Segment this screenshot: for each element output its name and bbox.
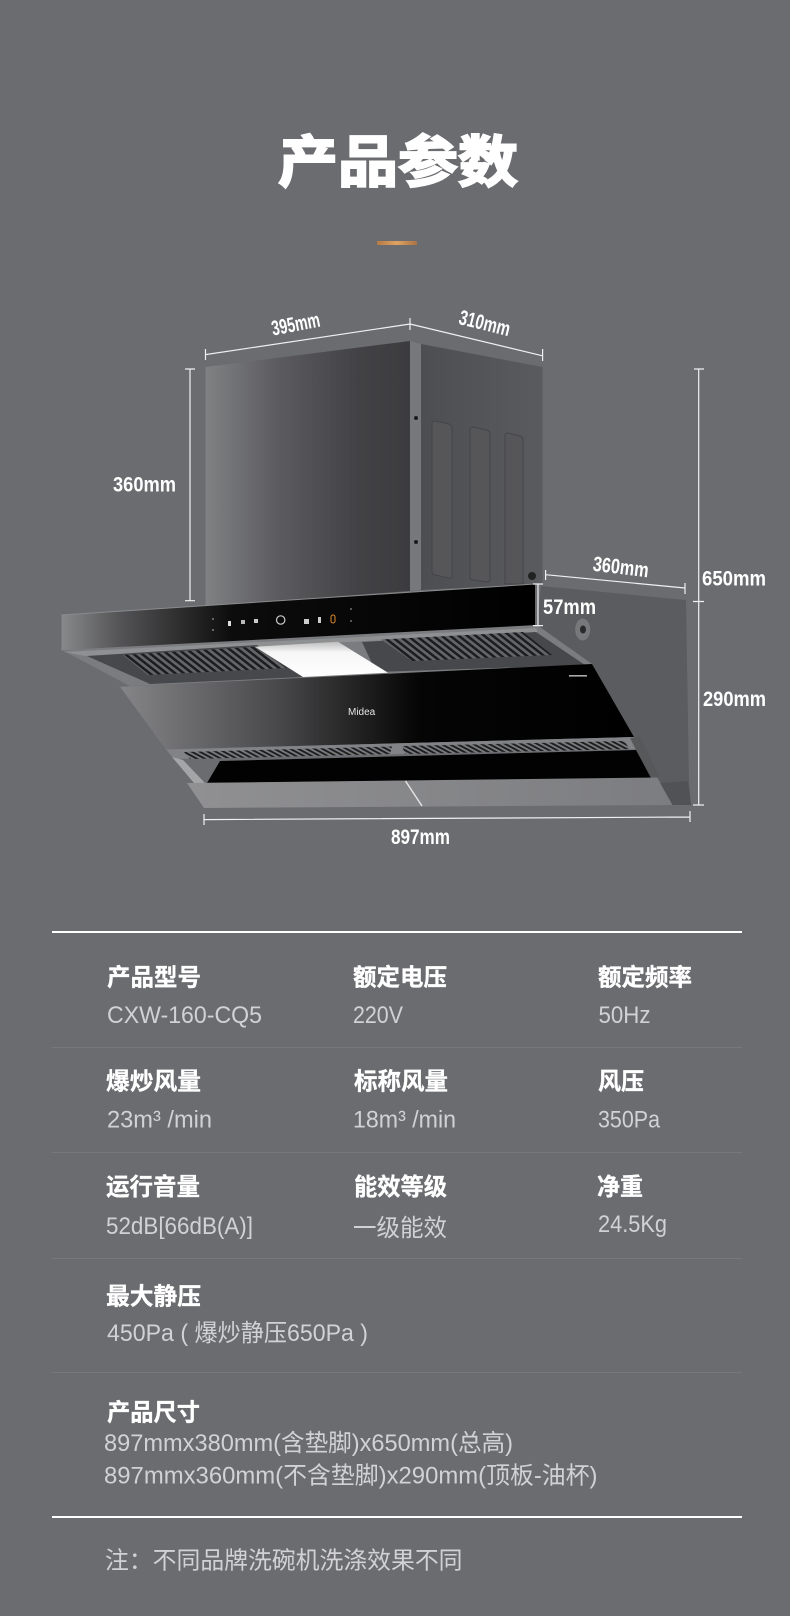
- footnote: 注：不同品牌洗碗机洗涤效果不同: [105, 1548, 462, 1574]
- side panel foot: [660, 781, 691, 805]
- accent bar: [377, 241, 417, 245]
- spec: product dimensions: 897mmx380mm(含垫脚)x650mm(总高): [104, 1430, 513, 1457]
- dimension: 395mm: 395mm: [270, 309, 322, 341]
- dimension: 360mm depth: [546, 553, 685, 594]
- duct cover side face: [414, 344, 543, 590]
- spec: nominal airflow: 18m³ /min: [353, 1106, 456, 1134]
- dimension: 310mm: [410, 306, 543, 361]
- title: 产品参数: [278, 131, 518, 194]
- spec: rated voltage: 额定电压: [353, 964, 447, 992]
- dimension: 310mm: 310mm: [457, 306, 513, 341]
- spec: efficiency grade: 一级能效: [353, 1215, 447, 1242]
- product illustration: range hood: [62, 341, 691, 808]
- black glass panel: [120, 664, 634, 750]
- spec: efficiency grade: [353, 1174, 447, 1242]
- right filter vent: [381, 632, 552, 661]
- spec: noise: 运行音量: [106, 1174, 200, 1201]
- spec: boost airflow: 23m³ /min: [107, 1106, 212, 1134]
- spec: model: [107, 964, 262, 1029]
- dimension: 360mm depth: 360mm: [592, 553, 650, 582]
- dimension: 360mm height of duct: [113, 369, 195, 601]
- spec: efficiency grade: 能效等级: [354, 1174, 447, 1201]
- canopy underside: [62, 625, 592, 686]
- duct cover front face: [206, 341, 410, 606]
- dimension: 650mm and 290mm: 290mm: [703, 688, 766, 711]
- dimension: 57mm: [533, 584, 596, 626]
- spec: model: CXW-160-CQ5: [107, 1002, 262, 1029]
- spec: boost airflow: 爆炒风量: [106, 1068, 201, 1096]
- spec: model: 产品型号: [107, 964, 201, 992]
- spec: noise: [106, 1174, 253, 1240]
- duct cover edge strip: [410, 341, 421, 591]
- spec: nominal airflow: [353, 1068, 456, 1134]
- spec: rated frequency: [598, 964, 692, 1029]
- light panel: [255, 642, 388, 677]
- spec: net weight: 净重: [597, 1174, 643, 1201]
- spec: product dimensions: 产品尺寸: [107, 1400, 200, 1426]
- spec: net weight: [597, 1174, 667, 1238]
- specification table: [52, 932, 742, 1517]
- left filter vent: [123, 647, 287, 675]
- spec: rated frequency: 50Hz: [598, 1002, 650, 1029]
- spec: product dimensions: 897mmx360mm(不含垫脚)x290mm(顶板-油杯): [104, 1462, 598, 1490]
- dimension: 650mm and 290mm: 650mm: [702, 568, 766, 590]
- knob on side panel: [575, 618, 590, 640]
- spec: rated frequency: 额定频率: [598, 964, 692, 992]
- dimension: 650mm and 290mm: [693, 369, 766, 805]
- spec: max static pressure: 450Pa ( 爆炒静压650Pa ): [107, 1320, 368, 1347]
- dimension: 897mm: [204, 811, 690, 849]
- control bar: [62, 584, 535, 650]
- spec: max static pressure: 最大静压: [106, 1284, 201, 1310]
- spec: product dimensions: [104, 1400, 598, 1490]
- dimension: 395mm: [206, 309, 410, 360]
- spec: rated voltage: 220V: [353, 1002, 403, 1029]
- spec: rated voltage: [353, 964, 447, 1029]
- spec: nominal airflow: 标称风量: [354, 1068, 448, 1096]
- spec: noise: 52dB[66dB(A)]: [106, 1213, 253, 1240]
- spec: max static pressure: [106, 1284, 368, 1347]
- oil tray: [187, 778, 672, 808]
- dimension: 897mm: 897mm: [391, 826, 450, 849]
- spec: boost airflow: [106, 1068, 212, 1134]
- spec: air pressure: 350Pa: [598, 1106, 661, 1134]
- lower intake strip: [166, 737, 640, 759]
- spec: air pressure: [598, 1068, 661, 1134]
- black cavity: [207, 750, 651, 783]
- side panel: [537, 586, 691, 805]
- dimension: 360mm height of duct: 360mm: [113, 474, 176, 496]
- spec: net weight: 24.5Kg: [598, 1211, 667, 1238]
- brand logo: Midea: [348, 707, 376, 718]
- struts: [172, 737, 660, 783]
- spec: air pressure: 风压: [598, 1068, 644, 1096]
- dimension: 57mm: 57mm: [543, 596, 596, 619]
